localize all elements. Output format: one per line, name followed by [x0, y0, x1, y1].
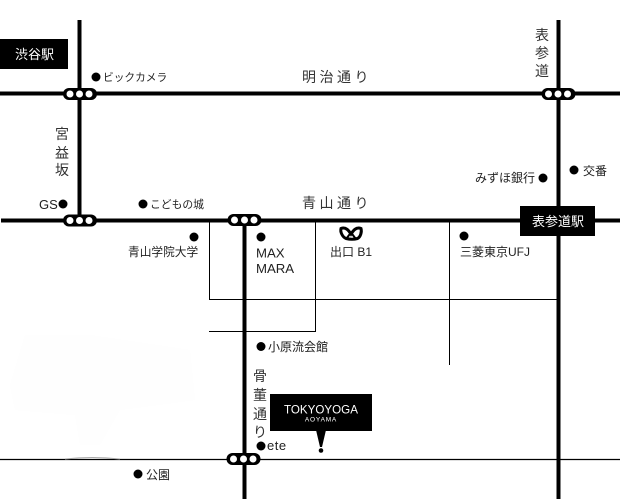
landmark: MUFG Bank: 三菱東京UFJ [460, 245, 530, 259]
landmark: Park [134, 468, 170, 482]
landmark: Park: 公園 [146, 468, 170, 482]
road label: Miyamasuzaka: 宮 [55, 126, 69, 142]
road label: Kotto-dori: り [253, 424, 267, 440]
road label: Kotto-dori: 董 [253, 387, 267, 403]
destination callout: TOKYOYOGA [270, 394, 372, 453]
station label: Omotesando: 表参道駅 [532, 214, 584, 229]
signal: Aoyama-dori and Miyamasuzaka [63, 214, 97, 226]
landmark: Bic Camera: ビックカメラ [103, 72, 167, 84]
destination callout: TOKYOYOGA: TOKYOYOGA [284, 404, 358, 416]
landmark: Max Mara: MAX [256, 246, 285, 260]
landmark: GS [39, 197, 68, 212]
road label: Omotesando vertical: 参 [535, 45, 549, 61]
metro exit icon and label: 出口 B1 [330, 245, 372, 259]
station label: Omotesando [520, 206, 595, 236]
road label: Kotto-dori [253, 368, 267, 440]
landmark: Aoyama Gakuin University [128, 232, 198, 259]
road label: Aoyama-dori: 青山通り [302, 195, 372, 211]
landmark: Max Mara [256, 232, 294, 276]
landmark: MUFG Bank [460, 232, 530, 259]
landmark: Police box [570, 164, 607, 178]
signal: Aoyama-dori and Kotto-dori [228, 214, 262, 226]
landmark: Aoyama Gakuin University: 青山学院大学 [128, 245, 198, 259]
faint background watermark [10, 335, 195, 445]
road label: Omotesando vertical: 表 [535, 27, 549, 43]
destination callout: TOKYOYOGA: AOYAMA [305, 416, 337, 424]
landmark: Police box: 交番 [583, 164, 607, 178]
landmark: GS: GS [39, 197, 58, 212]
road label: Kotto-dori: 通 [253, 406, 267, 422]
metro exit icon and label [330, 228, 372, 259]
station label: Shibuya [0, 39, 68, 69]
signal: Meiji-dori and Miyamasuzaka [63, 88, 97, 100]
landmark: Ohara school: 小原流会館 [268, 340, 328, 354]
road label: Omotesando vertical: 道 [535, 63, 549, 79]
road label: Meiji-dori: 明治通り [302, 69, 372, 85]
landmark: Max Mara: MARA [256, 261, 294, 276]
station label: Shibuya: 渋谷駅 [15, 47, 54, 62]
landmark: Mizuho Bank: みずほ銀行 [475, 171, 535, 185]
landmark: ete [256, 438, 287, 453]
road label: Kotto-dori: 骨 [253, 368, 267, 384]
landmark: ete: ete [267, 438, 287, 453]
landmark: Kodomo no Shiro: こどもの城 [150, 198, 204, 211]
road label: Miyamasuzaka [55, 126, 69, 178]
road label: Omotesando vertical [535, 27, 549, 79]
signal: Meiji-dori and Omotesando [542, 88, 576, 100]
signal: Kotto-dori south [226, 453, 260, 465]
road label: Miyamasuzaka: 坂 [55, 162, 69, 178]
road label: Miyamasuzaka: 益 [55, 145, 69, 161]
